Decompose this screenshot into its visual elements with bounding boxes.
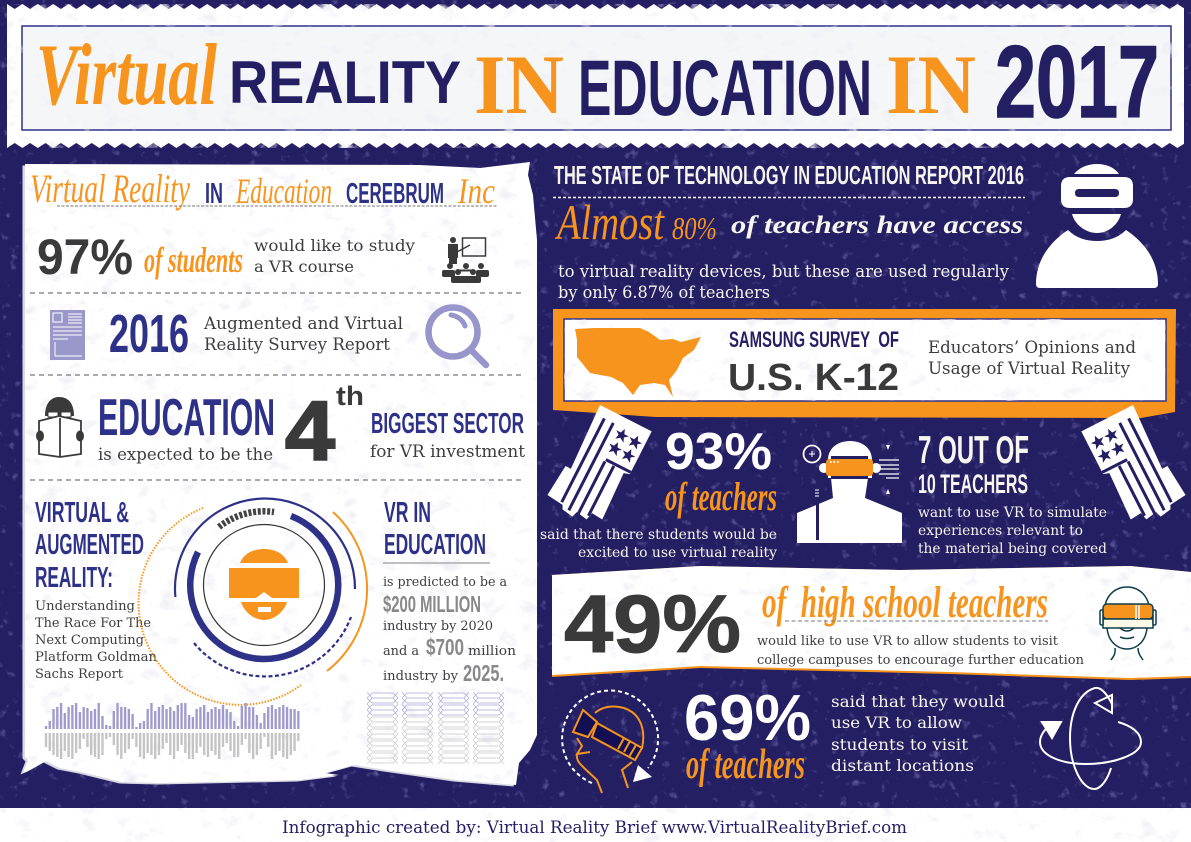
stat: 49% of high school teachers — [564, 578, 1085, 670]
title: EDUCATION — [578, 43, 872, 132]
stat: 49% of high school teachers: college campuses to encourage further education — [757, 653, 1085, 668]
footer credit: Infographic created by: Virtual Reality Brief www.VirtualRealityBrief.com — [282, 818, 907, 838]
text block: VR in education: 2025. — [463, 660, 504, 686]
stat: 93% of teachers: of teachers — [665, 474, 777, 519]
text block: virtual and augmented reality: Understanding — [35, 599, 135, 614]
text block: VR in education: $200 MILLION — [383, 591, 481, 617]
stat: 69% of teachers: students to visit — [831, 735, 969, 754]
icon: rotation arrows — [1040, 688, 1141, 789]
stat: 2016 survey report — [109, 304, 403, 364]
icon: circular VR head emblem — [139, 499, 367, 705]
text block: VR in education: EDUCATION — [384, 529, 486, 561]
stat: 7 out of 10 teachers: the material being covered — [918, 541, 1107, 557]
chart: decorative coil columns — [367, 692, 504, 764]
stat: 49% of high school teachers: of high school teachers — [762, 578, 1048, 627]
stat: almost 80 percent of teachers: 80% — [672, 210, 717, 246]
stat: 69% of teachers: distant locations — [831, 756, 974, 775]
survey heading: Usage of Virtual Reality — [928, 359, 1131, 378]
text block: virtual and augmented reality — [35, 497, 158, 682]
stat: 7 out of 10 teachers: experiences relevant to — [918, 523, 1083, 539]
text block: virtual and augmented reality: The Race For The — [35, 616, 151, 631]
stat: education 4th biggest sector — [98, 381, 525, 478]
stat: 49% of high school teachers: 49% — [564, 579, 741, 670]
title — [36, 25, 1159, 139]
icon: report document — [50, 310, 85, 360]
stat: 2016 survey report: Augmented and Virtual — [203, 314, 403, 333]
text block: VR in education: industry by — [383, 669, 459, 684]
stat: almost 80 percent of teachers: Almost — [555, 194, 665, 250]
top banner — [7, 4, 1184, 148]
left panel heading: CEREBRUM — [346, 178, 444, 210]
stat: 93% of teachers: said that there students would be — [540, 527, 777, 543]
text block: virtual and augmented reality: Next Computing — [35, 633, 144, 648]
stat: 69% of teachers: of teachers — [686, 742, 805, 788]
text block: VR in education: and a — [383, 644, 419, 659]
stat: 93% of teachers: 93% — [665, 423, 772, 481]
title: Virtual — [36, 27, 217, 124]
stat: 7 out of 10 teachers — [918, 429, 1107, 557]
footer band — [0, 808, 1191, 842]
stat: 97% of students: a VR course — [254, 257, 354, 276]
left panel heading: Inc — [457, 171, 495, 211]
icon: magnifier — [428, 308, 486, 365]
text block: VR in education: million — [468, 644, 517, 659]
icon: face with VR goggles — [1100, 587, 1156, 660]
panel: orange survey frame — [553, 309, 1176, 418]
stat: almost 80 percent of teachers — [555, 194, 1023, 302]
icon: side view head in VR goggles — [562, 691, 658, 793]
stat: 69% of teachers — [684, 681, 1005, 788]
survey heading: U.S. K-12 — [728, 357, 899, 399]
stat: 2016 survey report: Reality Survey Report — [204, 335, 390, 354]
chart: decorative waveform bars — [46, 703, 298, 759]
text block: virtual and augmented reality: Platform Goldman — [35, 650, 158, 665]
stat: 69% of teachers: 69% — [684, 681, 811, 754]
stat: 2016 survey report: 2016 — [109, 304, 189, 364]
icon: reader with book — [36, 397, 84, 457]
title: IN — [474, 38, 564, 132]
stat: 97% of students: 97% — [37, 229, 133, 285]
left panel heading — [30, 166, 498, 211]
stat: 97% of students — [37, 229, 415, 285]
stat: education 4th biggest sector: 4 — [285, 384, 335, 478]
stat: 7 out of 10 teachers: 10 TEACHERS — [918, 469, 1028, 499]
panel: high school teachers white band — [552, 566, 1191, 680]
text block: VR in education — [383, 497, 517, 686]
stat: almost 80 percent of teachers: to virtual reality devices, but these are used regularly — [558, 262, 1010, 281]
stat: almost 80 percent of teachers: by only 6.87% of teachers — [558, 283, 770, 302]
stat: education 4th biggest sector: th — [336, 381, 364, 411]
flags overlapping the frame — [544, 402, 1189, 531]
stat: almost 80 percent of teachers: of teachers have access — [731, 212, 1023, 239]
stat: education 4th biggest sector: is expected to be the — [98, 445, 273, 464]
survey heading — [728, 327, 1136, 399]
survey heading: SAMSUNG SURVEY OF — [729, 327, 899, 352]
left panel heading: Education — [235, 171, 332, 211]
text block: VR in education: industry by 2020 — [383, 619, 493, 634]
text block: virtual and augmented reality: AUGMENTED — [35, 529, 144, 561]
icon: white VR headset person — [1036, 164, 1158, 288]
icon: teacher and class — [442, 237, 489, 283]
stat: education 4th biggest sector: for VR investment — [370, 442, 525, 461]
text block: virtual and augmented reality: VIRTUAL & — [35, 497, 129, 529]
stat: 49% of high school teachers: would like to use VR to allow students to visit — [757, 634, 1059, 649]
stat: 69% of teachers: said that they would — [831, 692, 1005, 711]
text block: virtual and augmented reality: Sachs Report — [35, 667, 124, 682]
text block: VR in education: is predicted to be a — [383, 575, 507, 590]
text block: VR in education: VR IN — [384, 497, 431, 529]
stat: 93% of teachers — [540, 423, 777, 561]
stat: education 4th biggest sector: EDUCATION — [98, 389, 275, 447]
survey heading: Educators’ Opinions and — [928, 338, 1136, 357]
text block: VR in education: $700 — [426, 634, 464, 660]
stat: 93% of teachers: excited to use virtual reality — [578, 545, 777, 561]
icon: person wearing orange VR headset — [797, 441, 902, 543]
panel: left white torn paper — [20, 162, 537, 786]
stat: 7 out of 10 teachers: 7 OUT OF — [918, 429, 1029, 472]
left panel heading: Virtual Reality — [30, 166, 190, 211]
title: REALITY — [229, 49, 461, 116]
stat: 97% of students: would like to study — [254, 236, 415, 255]
stat: education 4th biggest sector: BIGGEST SECTOR — [371, 408, 524, 440]
stat: 97% of students: of students — [144, 240, 243, 280]
text block: virtual and augmented reality: REALITY: — [35, 562, 113, 594]
left panel heading: IN — [205, 178, 223, 210]
map: United States — [575, 328, 701, 397]
title: IN — [886, 38, 976, 132]
stat: 69% of teachers: use VR to allow — [831, 713, 962, 732]
stat: 7 out of 10 teachers: want to use VR to simulate — [918, 505, 1107, 521]
